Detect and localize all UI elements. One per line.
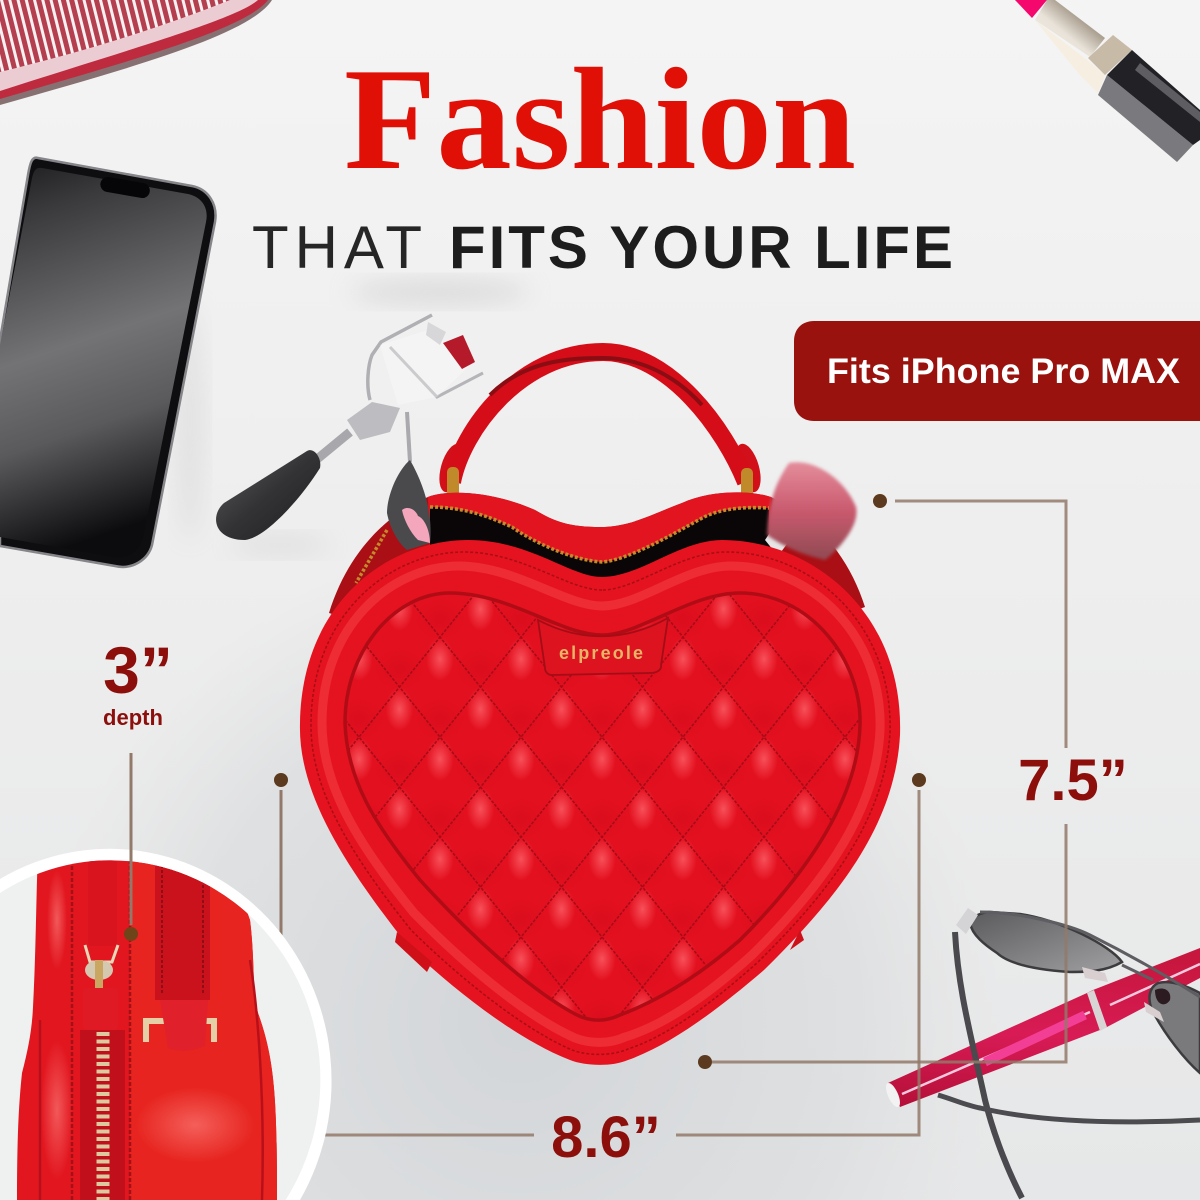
width measurement <box>274 773 926 1170</box>
curler finger loop <box>387 460 431 550</box>
bag outer shell <box>300 540 900 1065</box>
depth measurement: depth <box>103 705 163 730</box>
zipper tab lower <box>83 988 118 1030</box>
quilted panel <box>345 593 860 1020</box>
badge: iPhone fit <box>794 321 1200 421</box>
height measurement <box>698 494 1128 1069</box>
zipper <box>356 507 769 583</box>
depth side strap <box>155 860 210 1000</box>
subtitle: FITS YOUR LIFE <box>449 214 953 281</box>
bag back panel <box>329 492 865 700</box>
bag top lip <box>428 492 771 600</box>
icon: smartphone <box>0 158 216 567</box>
width measurement: 8.6” <box>551 1105 661 1170</box>
icon: eyelash curler <box>216 315 483 540</box>
phone camera pill <box>99 176 151 199</box>
sunglasses <box>938 908 1200 1198</box>
inset circle frame <box>0 849 332 1200</box>
bag interior <box>430 507 770 600</box>
pen <box>883 948 1200 1109</box>
icon: hair comb <box>0 0 272 105</box>
shell rim highlight <box>322 566 880 1042</box>
icon: sunglasses and pen <box>883 908 1200 1198</box>
bag handle <box>435 352 765 495</box>
side buckle tabs <box>395 930 804 972</box>
zipper tab upper <box>88 860 117 946</box>
brand patch: elpreole <box>559 643 643 663</box>
quilt panel border <box>345 593 860 1020</box>
zipper pull <box>85 945 118 988</box>
icon: lipstick <box>1015 0 1200 162</box>
brand patch <box>538 618 668 675</box>
strap buckle <box>146 1021 214 1042</box>
makeup brush <box>765 462 857 560</box>
subtitle: THAT <box>252 214 422 281</box>
quilting grid <box>346 595 858 1016</box>
depth measurement <box>103 633 173 941</box>
quilting highlights <box>345 593 860 1020</box>
handbag <box>300 343 900 1065</box>
depth inset <box>0 849 332 1200</box>
shell stitching <box>311 552 890 1054</box>
bag side view <box>17 850 277 1200</box>
title: Fashion <box>344 38 856 200</box>
depth measurement: 3” <box>103 633 173 707</box>
height measurement: 7.5” <box>1018 748 1128 813</box>
handle clips <box>447 467 753 502</box>
badge: iPhone fit: Fits iPhone Pro MAX <box>827 352 1181 391</box>
zipper tape <box>80 1030 125 1200</box>
